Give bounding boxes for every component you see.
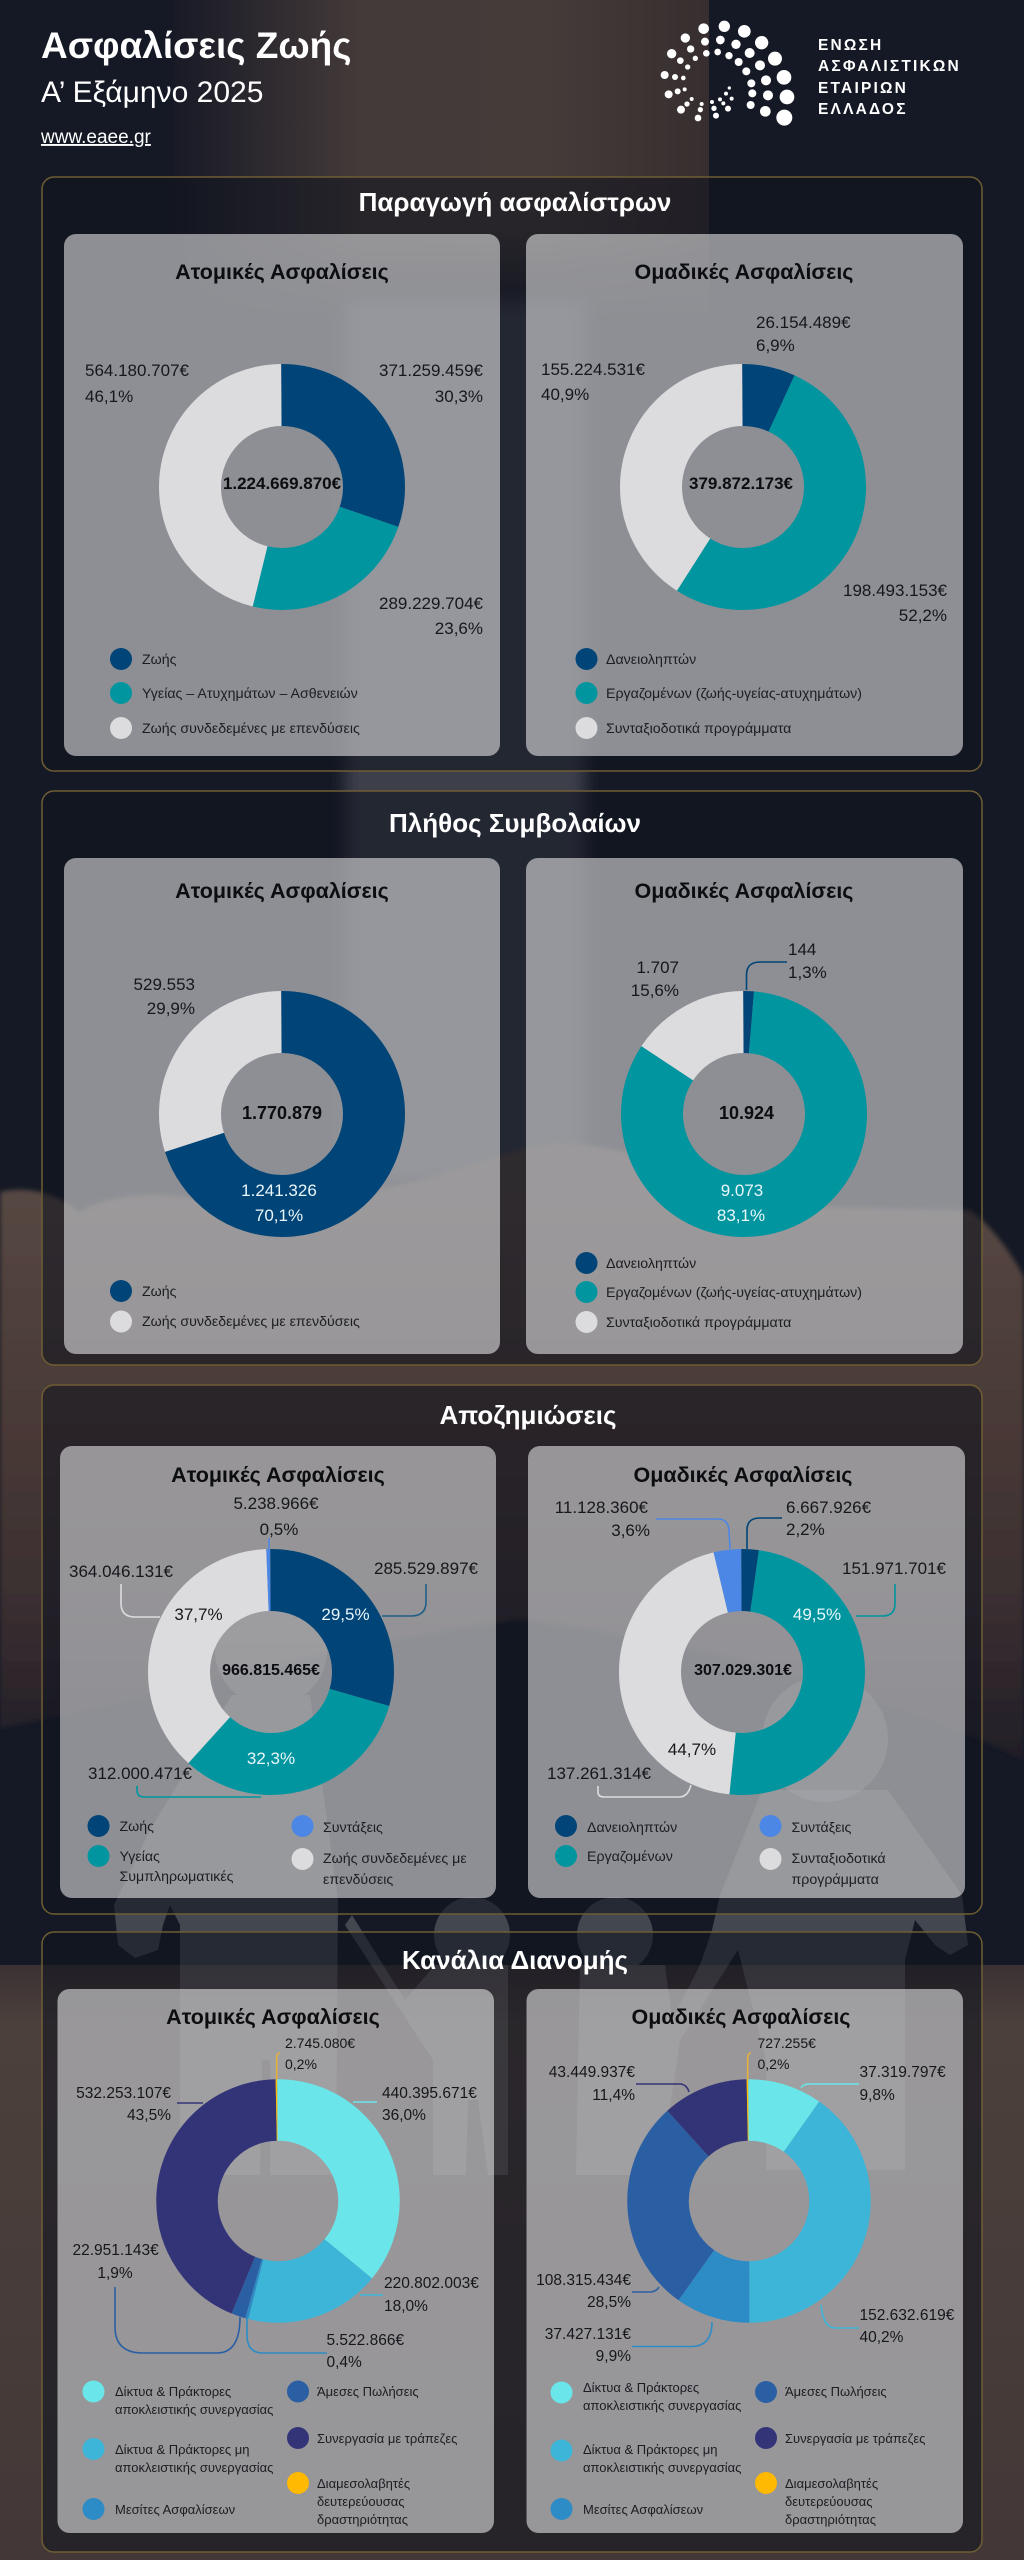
chart values: 312.000.471€ — [88, 1764, 193, 1783]
legend: Άμεσες Πωλήσεις — [317, 2384, 419, 2399]
chart values: 529.553 — [134, 975, 195, 994]
legend: Διαμεσολαβητές — [785, 2476, 878, 2491]
header: title block: Ασφαλίσεις Ζωής — [41, 25, 351, 66]
chart values: 6,9% — [756, 336, 795, 355]
logo wordmark: ΕΛΛΑΔΟΣ — [818, 101, 908, 118]
heading: Κανάλια Διανομής — [402, 1945, 628, 1975]
legend: επενδύσεις — [323, 1872, 393, 1888]
chart values: 43.449.937€ — [549, 2064, 635, 2081]
legend: Δανειοληπτών — [587, 1820, 677, 1836]
chart values — [541, 313, 948, 625]
legend: Δίκτυα & Πράκτορες — [583, 2380, 699, 2395]
chart values: 1.770.879 — [242, 1103, 322, 1123]
legend: δευτερεύουσας — [317, 2494, 405, 2509]
chart values: 0,5% — [260, 1520, 298, 1539]
legend: αποκλειστικής συνεργασίας — [583, 2398, 741, 2413]
card: Ατομικές Ασφαλίσεις — [58, 1989, 494, 2533]
legend: Συνεργασία με τράπεζες — [317, 2431, 457, 2446]
chart values: 152.632.619€ — [860, 2307, 955, 2324]
legend: Υγείας – Ατυχημάτων – Ασθενειών — [142, 686, 358, 702]
legend: Ζωής — [120, 1819, 154, 1835]
chart values: 1.224.669.870€ — [223, 474, 342, 493]
legend — [555, 1815, 886, 1888]
chart values: 11.128.360€ — [555, 1498, 649, 1517]
chart values: 44,7% — [668, 1740, 716, 1759]
logo wordmark: ΕΤΑΙΡΙΩΝ — [818, 80, 908, 97]
chart values: 5.522.866€ — [326, 2332, 404, 2349]
header: title block: www.eaee.gr — [40, 127, 152, 148]
chart values — [134, 975, 322, 1225]
chart values: 52,2% — [899, 606, 947, 625]
chart values: 0,4% — [326, 2354, 362, 2371]
chart values: 49,5% — [793, 1605, 841, 1624]
chart values — [69, 1494, 479, 1783]
legend: Εργαζομένων — [587, 1849, 673, 1865]
chart values: 1,3% — [788, 963, 827, 982]
chart values: 28,5% — [587, 2294, 631, 2311]
heading: Αποζημιώσεις — [439, 1400, 617, 1430]
chart values: 36,0% — [382, 2107, 426, 2124]
chart values: 1.241.326 — [241, 1181, 317, 1200]
chart values — [631, 940, 827, 1225]
card title: Ομαδικές Ασφαλίσεις — [635, 879, 853, 903]
legend: Ζωής — [142, 652, 177, 668]
legend: Συντάξεις — [323, 1820, 383, 1836]
legend — [110, 1280, 360, 1332]
legend: δραστηριότητας — [785, 2512, 876, 2527]
logo wordmark — [818, 37, 961, 118]
legend — [88, 1815, 467, 1888]
chart values: 9.073 — [721, 1181, 763, 1200]
chart values — [547, 1498, 947, 1783]
chart values: 1.707 — [636, 958, 679, 977]
legend: Διαμεσολαβητές — [317, 2476, 410, 2491]
chart values: 1,9% — [97, 2265, 133, 2282]
panel: Κανάλια Διανομής — [42, 1932, 982, 2552]
leader lines — [115, 2053, 383, 2353]
chart values: 37.319.797€ — [860, 2064, 946, 2081]
chart values: 23,6% — [435, 619, 483, 638]
card: Ομαδικές Ασφαλίσεις — [526, 234, 963, 756]
chart values: 37.427.131€ — [545, 2326, 631, 2343]
panel: Παραγωγή ασφαλίστρων — [42, 177, 982, 771]
card: Ομαδικές Ασφαλίσεις — [526, 1989, 963, 2533]
legend: Συνεργασία με τράπεζες — [785, 2431, 925, 2446]
legend: Δανειοληπτών — [606, 652, 696, 668]
chart values: 289.229.704€ — [379, 594, 484, 613]
legend: Δίκτυα & Πράκτορες μη — [583, 2442, 718, 2457]
chart values: 0,2% — [285, 2056, 317, 2072]
legend: δευτερεύουσας — [785, 2494, 873, 2509]
legend: Υγείας — [120, 1849, 160, 1865]
legend — [110, 648, 360, 739]
legend: Ζωής — [142, 1284, 177, 1300]
leader lines — [598, 1518, 895, 1797]
chart values: 108.315.434€ — [536, 2272, 631, 2289]
card title: Ομαδικές Ασφαλίσεις — [632, 2005, 850, 2029]
card: Ατομικές Ασφαλίσεις — [60, 1446, 496, 1898]
chart values: 364.046.131€ — [69, 1562, 174, 1581]
logo: Ένωση Ασφαλιστικών Εταιριών Ελλάδος — [661, 21, 961, 126]
chart values: 379.872.173€ — [689, 474, 794, 493]
chart values: 2,2% — [786, 1520, 825, 1539]
icon: dotted circle logo — [661, 21, 794, 126]
legend: Συνταξιοδοτικά — [792, 1851, 886, 1867]
legend: Συνταξιοδοτικά προγράμματα — [606, 721, 791, 737]
leader lines — [121, 1538, 426, 1797]
chart values: 29,9% — [147, 999, 195, 1018]
leader lines — [632, 2053, 859, 2346]
chart values: 10.924 — [719, 1103, 774, 1123]
donut chart — [187, 2110, 369, 2292]
chart values: 151.971.701€ — [842, 1559, 947, 1578]
chart values: 5.238.966€ — [233, 1494, 319, 1513]
chart values — [72, 2035, 479, 2371]
legend — [576, 648, 862, 739]
donut chart — [190, 1022, 374, 1206]
chart values: 9,8% — [860, 2087, 895, 2104]
legend: Εργαζομένων (ζωής-υγείας-ατυχημάτων) — [606, 686, 862, 702]
legend: αποκλειστικής συνεργασίας — [115, 2460, 273, 2475]
chart values: 15,6% — [631, 981, 679, 1000]
chart values: 40,2% — [860, 2329, 904, 2346]
legend: Συντάξεις — [792, 1820, 852, 1836]
chart values: 966.815.465€ — [222, 1662, 320, 1679]
legend: Ζωής συνδεδεμένες με επενδύσεις — [142, 1314, 360, 1330]
chart values: 198.493.153€ — [843, 581, 948, 600]
card title: Ατομικές Ασφαλίσεις — [171, 1463, 385, 1487]
legend: Δανειοληπτών — [606, 1256, 696, 1272]
logo wordmark: ΕΝΩΣΗ — [818, 37, 883, 54]
heading: Πλήθος Συμβολαίων — [389, 808, 641, 838]
chart values: 220.802.003€ — [384, 2275, 479, 2292]
chart values: 83,1% — [717, 1206, 765, 1225]
legend: Άμεσες Πωλήσεις — [785, 2384, 887, 2399]
legend: Εργαζομένων (ζωής-υγείας-ατυχημάτων) — [606, 1285, 862, 1301]
header: title block: Α’ Εξάμηνο 2025 — [41, 76, 263, 109]
legend: Συμπληρωματικές — [120, 1869, 234, 1885]
legend: δραστηριότητας — [317, 2512, 408, 2527]
legend: αποκλειστικής συνεργασίας — [115, 2402, 273, 2417]
card: Ομαδικές Ασφαλίσεις — [526, 858, 963, 1354]
chart values: 18,0% — [384, 2298, 428, 2315]
chart values: 22.951.143€ — [72, 2242, 159, 2259]
header: title block — [40, 25, 351, 148]
chart values: 46,1% — [85, 387, 133, 406]
leader line — [746, 962, 787, 990]
logo wordmark: ΑΣΦΑΛΙΣΤΙΚΩΝ — [818, 58, 961, 75]
chart values: 285.529.897€ — [374, 1559, 479, 1578]
chart values: 43,5% — [127, 2107, 171, 2124]
donut chart — [651, 395, 835, 579]
legend: Δίκτυα & Πράκτορες — [115, 2384, 231, 2399]
card: Ατομικές Ασφαλίσεις — [64, 234, 500, 756]
chart values: 11,4% — [592, 2087, 635, 2104]
heading: Παραγωγή ασφαλίστρων — [359, 187, 671, 217]
donut chart — [652, 1022, 836, 1206]
chart values: 371.259.459€ — [379, 361, 484, 380]
card: Ομαδικές Ασφαλίσεις — [528, 1446, 965, 1898]
panel: Πλήθος Συμβολαίων — [42, 791, 982, 1365]
chart values: 32,3% — [247, 1749, 295, 1768]
chart values: 40,9% — [541, 385, 589, 404]
card title: Ατομικές Ασφαλίσεις — [175, 260, 389, 284]
chart values: 2.745.080€ — [285, 2035, 355, 2051]
chart values: 30,3% — [435, 387, 483, 406]
legend: Μεσίτες Ασφαλίσεων — [115, 2502, 235, 2517]
legend — [82, 2380, 457, 2527]
legend: αποκλειστικής συνεργασίας — [583, 2460, 741, 2475]
chart values: 440.395.671€ — [382, 2085, 477, 2102]
chart values: 37,7% — [174, 1605, 223, 1624]
chart values: 3,6% — [611, 1521, 650, 1540]
legend: Ζωής συνδεδεμένες με επενδύσεις — [142, 721, 360, 737]
donut chart — [658, 2110, 840, 2292]
card: Ατομικές Ασφαλίσεις — [64, 858, 500, 1354]
chart values — [536, 2035, 955, 2365]
chart values: 155.224.531€ — [541, 360, 646, 379]
chart values: 307.029.301€ — [694, 1662, 792, 1679]
legend: προγράμματα — [792, 1872, 879, 1888]
legend — [550, 2380, 925, 2527]
chart values: 564.180.707€ — [85, 361, 190, 380]
chart values: 144 — [788, 940, 816, 959]
chart values: 9,9% — [596, 2348, 631, 2365]
card title: Ατομικές Ασφαλίσεις — [175, 879, 389, 903]
chart values — [85, 361, 484, 638]
card title: Ατομικές Ασφαλίσεις — [166, 2005, 380, 2029]
chart values: 532.253.107€ — [76, 2085, 171, 2102]
legend — [576, 1252, 862, 1333]
donut chart — [190, 395, 374, 579]
chart values: 26.154.489€ — [756, 313, 851, 332]
panel: Αποζημιώσεις — [42, 1385, 982, 1914]
chart values: 727.255€ — [758, 2035, 816, 2051]
chart values: 6.667.926€ — [786, 1498, 872, 1517]
legend: Μεσίτες Ασφαλίσεων — [583, 2502, 703, 2517]
card title: Ομαδικές Ασφαλίσεις — [634, 1463, 852, 1487]
card title: Ομαδικές Ασφαλίσεις — [635, 260, 853, 284]
donut chart — [179, 1580, 363, 1764]
chart values: 0,2% — [758, 2056, 789, 2072]
chart values: 137.261.314€ — [547, 1764, 652, 1783]
chart values: 70,1% — [255, 1206, 303, 1225]
legend: Δίκτυα & Πράκτορες μη — [115, 2442, 250, 2457]
legend: Ζωής συνδεδεμένες με — [323, 1851, 467, 1867]
donut chart — [650, 1580, 834, 1764]
chart values: 29,5% — [321, 1605, 370, 1624]
legend: Συνταξιοδοτικά προγράμματα — [606, 1315, 791, 1331]
